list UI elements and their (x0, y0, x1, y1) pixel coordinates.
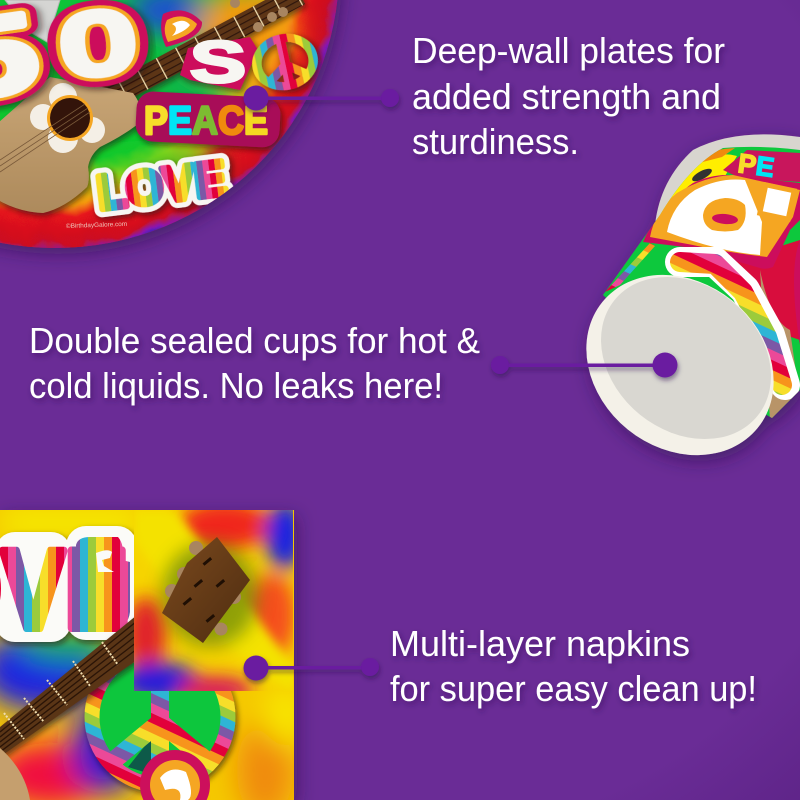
cup peace letters (723, 148, 800, 183)
plate caption: added strength and (412, 76, 721, 117)
cup zero edge (794, 240, 800, 345)
cup bottom inner disc (569, 243, 800, 473)
plate caption: sturdiness. (412, 121, 579, 162)
cup rim top (655, 134, 800, 240)
flap diagonal yellow band (134, 510, 300, 691)
apostrophe (161, 10, 202, 47)
gray gem (5, 0, 60, 42)
napkin (0, 501, 307, 800)
peace sign (252, 33, 318, 91)
napkin guitar body (0, 748, 30, 800)
napkin caption (390, 623, 757, 709)
napkin caption: Multi-layer napkins (390, 623, 690, 664)
cup caption: cold liquids. No leaks here! (29, 365, 443, 406)
guitar flower and sound hole (0, 83, 105, 172)
guitar headstock (162, 537, 258, 647)
guitar frets (4, 642, 118, 739)
cup (580, 132, 800, 470)
guitar body (0, 77, 143, 213)
cup bottom rim (550, 238, 800, 492)
plate caption (412, 30, 725, 162)
napkin base (0, 510, 294, 800)
plate caption: Deep-wall plates for (412, 30, 725, 71)
napkin numeral badge (140, 750, 210, 800)
cup caption (29, 320, 480, 406)
cup love wordmark (680, 262, 785, 385)
copyright line: ©BirthdayGalore.com (66, 220, 127, 230)
peace wordmark (135, 91, 281, 148)
cup body artwork (600, 130, 800, 450)
letter s: S (190, 30, 246, 95)
cup caption: Double sealed cups for hot & (29, 320, 480, 361)
cup left stripe (605, 243, 655, 292)
cup callout line and dots (491, 352, 678, 378)
cup smiley face (658, 154, 737, 218)
napkin guitar neck (0, 615, 137, 757)
napkin callout line and dots (244, 656, 379, 680)
napkin peace sign (92, 649, 228, 785)
cup peace letters: PE (736, 148, 776, 183)
plate (0, 0, 345, 254)
letter s (180, 30, 258, 95)
love wordmark: LOVE (94, 152, 230, 221)
napkin caption: for super easy clean up! (390, 668, 757, 709)
guitar neck (102, 0, 310, 101)
guitar strings (0, 621, 137, 752)
plate base disc (0, 0, 339, 248)
plate callout line and dots (244, 86, 399, 110)
peace wordmark: PEACE (144, 99, 268, 143)
cup number badge (643, 175, 800, 269)
napkin fold flap (134, 510, 293, 691)
guitar tuning pegs (230, 0, 288, 32)
love wordmark: LOVE (94, 152, 230, 221)
napkin tie-dye and artwork (0, 505, 307, 800)
plate artwork (0, 0, 345, 254)
